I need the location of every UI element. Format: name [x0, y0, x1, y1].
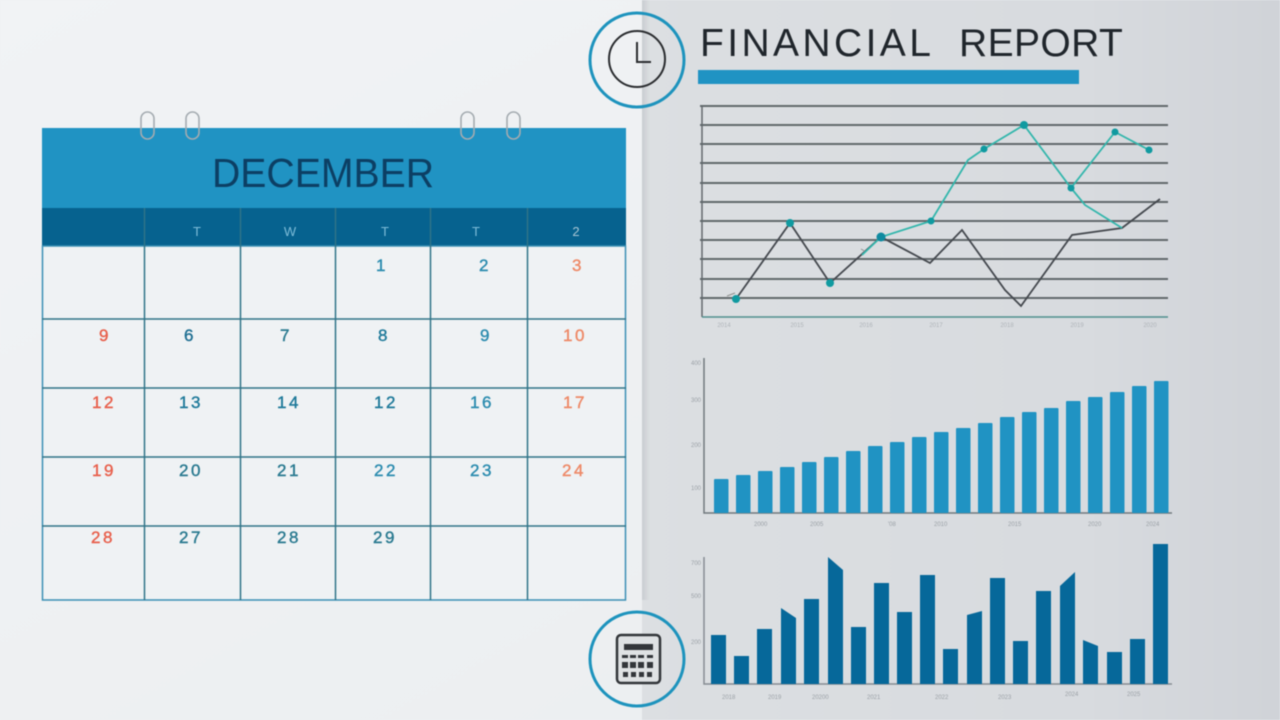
calendar header band: [42, 128, 626, 208]
variable chart axis labels: 20200: [812, 695, 829, 701]
dark series: [736, 199, 1160, 306]
line chart axis labels: 2019: [1070, 323, 1084, 329]
stray tick marks: [727, 249, 866, 296]
calendar dates: 23: [470, 461, 494, 480]
rising chart axis labels: 2020: [1088, 522, 1102, 528]
title: REPORT: [959, 22, 1123, 65]
rising chart axis labels: 100: [691, 486, 702, 492]
rising chart axis labels: 300: [691, 398, 702, 404]
calendar dates: 12: [374, 393, 398, 412]
variable chart axis labels: 2025: [1127, 692, 1141, 698]
calendar dates: 2: [479, 256, 491, 275]
calendar dates: 19: [92, 461, 116, 480]
bar chart: rising: [691, 358, 1172, 528]
variable chart axis labels: [691, 561, 1141, 701]
variable chart axis labels: 700: [691, 561, 702, 567]
weekday header row: T: [381, 224, 389, 239]
calendar dates: 16: [470, 393, 494, 412]
weekday header row: T: [472, 224, 480, 239]
line chart axis labels: 2014: [717, 323, 731, 329]
rising chart axis labels: 400: [691, 361, 702, 367]
icon: calculator: [590, 612, 684, 706]
calendar dates: 10: [563, 326, 587, 345]
rising chart axis labels: 2005: [810, 522, 824, 528]
line chart: [700, 106, 1168, 329]
variable chart axis labels: 2024: [1065, 692, 1079, 698]
calendar dates: 8: [378, 326, 390, 345]
calendar dates: 20: [179, 461, 203, 480]
icon: clock: [590, 13, 684, 107]
variable chart axis labels: 2018: [722, 695, 736, 701]
rising chart axis labels: 2015: [1008, 522, 1022, 528]
panel: December calendar: [42, 112, 626, 600]
variable chart axis labels: 2019: [768, 695, 782, 701]
data points: [732, 121, 1152, 303]
calendar dates: 24: [562, 461, 586, 480]
rising chart axis labels: 2000: [754, 522, 768, 528]
rising chart axis labels: '08: [888, 522, 896, 528]
title underline: [698, 70, 1079, 84]
calendar dates: 9: [480, 326, 492, 345]
weekday header row: T: [193, 224, 201, 239]
calendar dates: 22: [374, 461, 398, 480]
calendar dates: 1: [376, 256, 388, 275]
rising chart axis labels: 2024: [1146, 522, 1160, 528]
calendar dates: 7: [280, 326, 292, 345]
bar chart: variable: [691, 544, 1172, 701]
rising chart axis labels: [691, 361, 1160, 528]
calendar dates: 27: [179, 528, 203, 547]
variable chart axis labels: 2021: [867, 695, 881, 701]
line chart axis labels: 2017: [929, 323, 943, 329]
calendar dates: [91, 256, 587, 547]
line chart axis labels: 2015: [790, 323, 804, 329]
weekday header row: [42, 208, 626, 246]
weekday header row: 2: [572, 224, 580, 239]
binder clips: [141, 112, 520, 139]
calendar dates: 13: [179, 393, 203, 412]
title: FINANCIAL: [700, 22, 934, 65]
weekday header row: W: [284, 224, 297, 239]
variable chart axis labels: 2022: [935, 695, 949, 701]
line chart axis labels: 2020: [1143, 323, 1157, 329]
variable chart axis labels: 500: [691, 594, 702, 600]
line chart axis labels: [717, 323, 1157, 329]
line chart axis labels: 2016: [859, 323, 873, 329]
variable chart axis labels: 200: [691, 640, 702, 646]
calendar dates: 28: [91, 528, 115, 547]
calendar title: DECEMBER: [212, 150, 434, 196]
variable chart axis labels: 2023: [998, 695, 1012, 701]
panel: report background: [642, 0, 1280, 720]
line chart axis labels: 2018: [1000, 323, 1014, 329]
calendar dates: 6: [184, 326, 196, 345]
teal series: [862, 125, 1149, 255]
calendar dates: 21: [277, 461, 301, 480]
calendar dates: 29: [373, 528, 397, 547]
calendar dates: 3: [572, 256, 584, 275]
calendar grid: [42, 208, 626, 600]
calendar dates: 12: [92, 393, 116, 412]
calendar dates: 9: [99, 326, 111, 345]
rising chart axis labels: 2010: [934, 522, 948, 528]
calendar dates: 14: [277, 393, 301, 412]
calendar dates: 28: [277, 528, 301, 547]
rising chart axis labels: 200: [691, 443, 702, 449]
calendar dates: 17: [563, 393, 587, 412]
